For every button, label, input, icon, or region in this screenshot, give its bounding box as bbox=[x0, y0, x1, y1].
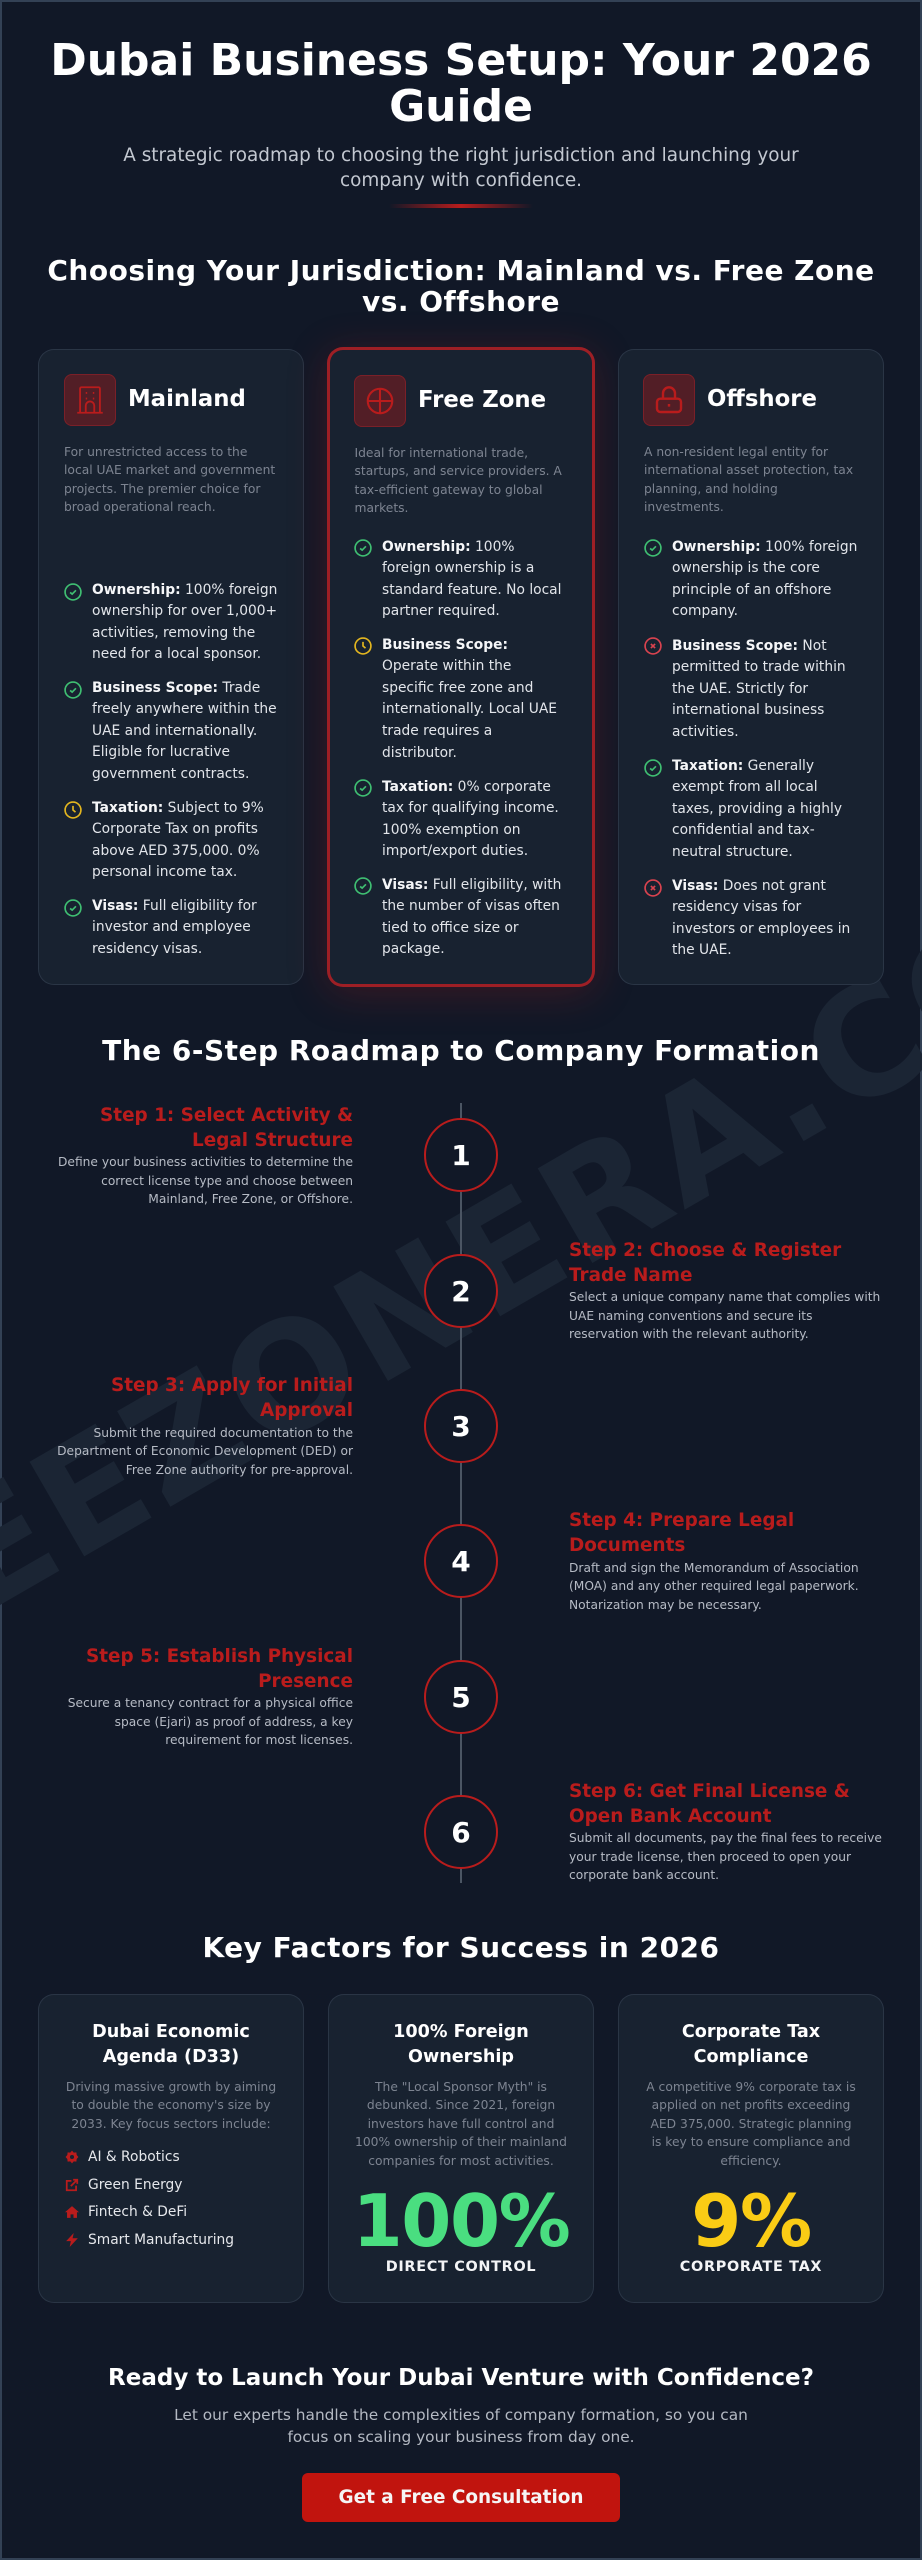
free zone visas: tied to office size or bbox=[382, 920, 519, 936]
step 5 text: Secure a tenancy contract for a physical office bbox=[68, 1696, 353, 1710]
free zone visas: Visas: Full eligibility, with bbox=[382, 877, 561, 893]
mainland ownership: ownership for over 1,000+ bbox=[92, 603, 277, 619]
offshore visas: the UAE. bbox=[672, 942, 732, 958]
free zone taxation bbox=[382, 779, 559, 859]
step 6 number bbox=[424, 1795, 498, 1869]
panel: D33 agenda: Smart Manufacturing bbox=[88, 2232, 234, 2248]
panel: D33 agenda: Fintech & DeFi bbox=[88, 2204, 187, 2220]
step 6 number: 6 bbox=[451, 1816, 471, 1848]
free zone business scope: distributor. bbox=[382, 745, 457, 761]
free zone description: markets. bbox=[354, 501, 408, 515]
offshore business scope: activities. bbox=[672, 724, 739, 740]
offshore ownership: ownership is the core bbox=[672, 560, 820, 576]
mainland business scope: Eligible for lucrative bbox=[92, 744, 230, 760]
step 3 number: 3 bbox=[451, 1410, 471, 1442]
mainland business scope: freely anywhere within the bbox=[92, 701, 277, 717]
step 2 text: Step 2: Choose & Register bbox=[569, 1240, 841, 1260]
step 1 text: Step 1: Select Activity & bbox=[100, 1104, 353, 1126]
step 4 text: Notarization may be necessary. bbox=[569, 1598, 762, 1612]
mainland description bbox=[64, 445, 275, 514]
offshore description: A non-resident legal entity for bbox=[644, 445, 828, 459]
free zone ownership bbox=[382, 539, 561, 619]
cta text: focus on scaling your business from day one. bbox=[287, 2428, 635, 2446]
offshore business scope: permitted to trade within bbox=[672, 659, 846, 675]
mainland description: For unrestricted access to the bbox=[64, 445, 247, 459]
cta text: Let our experts handle the complexities of company formation, so you can bbox=[174, 2406, 748, 2424]
D33 description bbox=[66, 2080, 276, 2131]
tax description: A competitive 9% corporate tax is bbox=[646, 2080, 856, 2094]
step 3 text: Department of Economic Development (DED) or bbox=[57, 1444, 353, 1458]
tax description: efficiency. bbox=[720, 2154, 782, 2168]
free zone ownership: foreign ownership is a bbox=[382, 560, 534, 576]
mainland taxation: Taxation: Subject to 9% bbox=[92, 800, 264, 816]
step 5 text: Step 5: Establish Physical bbox=[86, 1646, 353, 1666]
offshore ownership: company. bbox=[672, 603, 738, 619]
step 4 text bbox=[569, 1510, 859, 1612]
mainland taxation: Corporate Tax on profits bbox=[92, 821, 258, 837]
free zone business scope: Operate within the bbox=[382, 658, 511, 674]
mainland ownership: need for a local sponsor. bbox=[92, 646, 261, 662]
free zone taxation: tax for qualifying income. bbox=[382, 800, 559, 816]
panel: D33 agenda bbox=[38, 1994, 304, 2303]
step 1 text bbox=[58, 1104, 353, 1206]
mainland visas: Visas: Full eligibility for bbox=[92, 898, 257, 914]
panel: D33 agenda: AI & Robotics bbox=[88, 2149, 180, 2165]
offshore business scope: international business bbox=[672, 702, 824, 718]
step 2 text: Trade Name bbox=[569, 1264, 692, 1286]
step 1 number bbox=[424, 1118, 498, 1192]
step 6 text: Open Bank Account bbox=[569, 1806, 772, 1826]
offshore ownership bbox=[672, 539, 857, 619]
offshore title: Offshore bbox=[707, 386, 817, 412]
free zone business scope: specific free zone and bbox=[382, 680, 533, 696]
step 2 number: 2 bbox=[451, 1274, 471, 1308]
step 6 text: your trade license, then proceed to open your bbox=[569, 1850, 851, 1864]
tax title: Compliance bbox=[694, 2046, 808, 2066]
icon: cross bbox=[644, 637, 662, 655]
cta button: Get a Free Consultation bbox=[339, 2487, 583, 2508]
ownership description: investors have full control and bbox=[368, 2117, 554, 2131]
mainland ownership: Ownership: 100% foreign bbox=[92, 582, 277, 598]
offshore visas: residency visas for bbox=[672, 899, 801, 915]
free zone business scope: trade requires a bbox=[382, 723, 492, 739]
free zone visas: package. bbox=[382, 941, 445, 957]
mainland visas: investor and employee bbox=[92, 919, 251, 935]
free zone visas: the number of visas often bbox=[382, 898, 560, 914]
icon: check bbox=[64, 583, 82, 601]
offshore ownership: principle of an offshore bbox=[672, 582, 831, 598]
free zone ownership: partner required. bbox=[382, 603, 500, 619]
heading: jurisdiction bbox=[47, 254, 875, 318]
heading: jurisdiction: Choosing Your Jurisdiction: Mainland vs. Free Zone bbox=[47, 254, 875, 287]
step 3 text: Submit the required documentation to the bbox=[93, 1426, 353, 1440]
step 1 text: Legal Structure bbox=[192, 1130, 353, 1150]
stat label: DIRECT CONTROL bbox=[386, 2259, 536, 2275]
subtitle: company with confidence. bbox=[340, 170, 582, 190]
free zone taxation: 100% exemption on bbox=[382, 822, 521, 838]
free zone visas bbox=[382, 877, 561, 957]
free zone description bbox=[354, 446, 562, 515]
mainland description: broad operational reach. bbox=[64, 500, 216, 514]
step 2 number bbox=[424, 1254, 498, 1328]
tax title: Corporate Tax bbox=[682, 2022, 820, 2042]
ownership description: The "Local Sponsor Myth" is bbox=[375, 2080, 547, 2094]
mainland description: local UAE market and government bbox=[64, 463, 275, 477]
D33 title: Agenda (D33) bbox=[103, 2046, 239, 2066]
offshore taxation: exempt from all local bbox=[672, 779, 818, 795]
ownership title: 100% Foreign bbox=[393, 2022, 529, 2042]
step 5 number: 5 bbox=[451, 1680, 471, 1714]
step 3 number bbox=[424, 1389, 498, 1463]
ownership title: Ownership bbox=[408, 2046, 514, 2066]
sector: smart manufacturing bbox=[64, 2229, 66, 2231]
step 6 text: corporate bank account. bbox=[569, 1868, 719, 1882]
icon: clock bbox=[64, 801, 82, 819]
panel: D33 agenda: Green Energy bbox=[88, 2177, 182, 2193]
D33 description: 2033. Key focus sectors include: bbox=[71, 2117, 271, 2131]
step 2 text bbox=[569, 1240, 880, 1341]
step 6 text: Step 6: Get Final License & bbox=[569, 1780, 850, 1802]
timeline line bbox=[460, 1103, 462, 1883]
offshore business scope: the UAE. Strictly for bbox=[672, 681, 808, 697]
panel: mainland bbox=[38, 349, 304, 985]
icon: check bbox=[644, 539, 662, 557]
free zone title: Free Zone bbox=[418, 387, 546, 413]
step 2 text: reservation with the relevant authority. bbox=[569, 1327, 809, 1341]
mainland business scope: Business Scope: Trade bbox=[92, 680, 260, 696]
stat label: CORPORATE TAX bbox=[680, 2259, 822, 2275]
subtitle bbox=[123, 144, 799, 190]
step 4 number: 4 bbox=[451, 1544, 471, 1578]
icon: building bbox=[64, 374, 116, 426]
panel: free zone bbox=[327, 347, 595, 987]
free zone description: tax-efficient gateway to global bbox=[354, 483, 543, 497]
offshore description: planning, and holding bbox=[644, 482, 778, 496]
tax description: applied on net profits exceeding bbox=[652, 2098, 850, 2112]
icon: check bbox=[64, 899, 82, 917]
tax title bbox=[618, 2020, 884, 2069]
icon: check bbox=[354, 539, 372, 557]
sector: AI and robotics bbox=[66, 2149, 180, 2165]
offshore description: investments. bbox=[644, 500, 724, 514]
step 3 text: Approval bbox=[260, 1400, 353, 1421]
stat: 9%: 9% bbox=[691, 2179, 811, 2263]
free zone description: startups, and service providers. A bbox=[354, 464, 562, 478]
icon: globe bbox=[354, 375, 406, 427]
free zone ownership: Ownership: 100% bbox=[382, 539, 514, 555]
heading: roadmap: The 6-Step Roadmap to Company Formation bbox=[102, 1034, 820, 1067]
icon: clock bbox=[354, 637, 372, 655]
step 3 text bbox=[57, 1375, 354, 1477]
D33 description: Driving massive growth by aiming bbox=[66, 2080, 276, 2094]
step 1 text: Define your business activities to determine the bbox=[58, 1155, 353, 1169]
accent divider bbox=[389, 204, 533, 208]
offshore description bbox=[644, 445, 853, 514]
tax description: AED 375,000. Strategic planning bbox=[650, 2117, 852, 2131]
step 5 text: Presence bbox=[258, 1670, 353, 1692]
icon: cross bbox=[644, 879, 662, 897]
offshore taxation: neutral structure. bbox=[672, 844, 793, 860]
D33 title bbox=[92, 2022, 250, 2066]
free zone description: Ideal for international trade, bbox=[354, 446, 528, 460]
cta heading: Ready to Launch Your Dubai Venture with Confidence? bbox=[108, 2365, 814, 2391]
step 5 number bbox=[424, 1660, 498, 1734]
panel: offshore bbox=[618, 349, 884, 985]
ownership title bbox=[328, 2020, 594, 2069]
ownership description bbox=[328, 2078, 594, 2170]
offshore taxation: confidential and tax- bbox=[672, 822, 815, 838]
free zone ownership: standard feature. No local bbox=[382, 582, 561, 598]
offshore business scope bbox=[672, 638, 846, 740]
icon: check bbox=[644, 759, 662, 777]
free zone taxation: Taxation: 0% corporate bbox=[382, 779, 551, 795]
step 1 text: Mainland, Free Zone, or Offshore. bbox=[148, 1192, 353, 1206]
subtitle: A strategic roadmap to choosing the right jurisdiction and launching your bbox=[123, 144, 799, 166]
free zone business scope: internationally. Local UAE bbox=[382, 701, 557, 717]
panel: foreign ownership bbox=[328, 1994, 594, 2303]
tax description bbox=[618, 2078, 884, 2170]
step 4 text: Draft and sign the Memorandum of Association bbox=[569, 1561, 859, 1575]
offshore ownership: Ownership: 100% foreign bbox=[672, 539, 857, 555]
step 1 number: 1 bbox=[451, 1138, 471, 1172]
step 5 text: space (Ejari) as proof of address, a key bbox=[115, 1715, 353, 1729]
icon: check bbox=[354, 779, 372, 797]
mainland business scope: UAE and internationally. bbox=[92, 723, 257, 739]
icon: lock bbox=[643, 374, 695, 426]
offshore taxation: taxes, providing a highly bbox=[672, 801, 842, 817]
ownership description: 100% ownership of their mainland bbox=[355, 2135, 567, 2149]
title: Guide bbox=[389, 81, 533, 132]
tax description: is key to ensure compliance and bbox=[652, 2135, 850, 2149]
ownership description: debunked. Since 2021, foreign bbox=[367, 2098, 555, 2112]
offshore taxation bbox=[672, 758, 842, 860]
free zone business scope: Business Scope: bbox=[382, 637, 508, 653]
mainland description: projects. The premier choice for bbox=[64, 482, 260, 496]
offshore taxation: Taxation: Generally bbox=[672, 758, 814, 774]
mainland taxation: personal income tax. bbox=[92, 864, 237, 880]
free zone taxation: import/export duties. bbox=[382, 843, 528, 859]
mainland ownership bbox=[92, 582, 277, 662]
mainland ownership: activities, removing the bbox=[92, 625, 255, 641]
ownership description: companies for most activities. bbox=[368, 2154, 554, 2168]
offshore visas: investors or employees in bbox=[672, 921, 850, 937]
stat: 100%: 100% bbox=[353, 2179, 569, 2263]
step 3 text: Free Zone authority for pre-approval. bbox=[126, 1463, 353, 1477]
mainland title: Mainland bbox=[128, 386, 246, 412]
step 2 text: Select a unique company name that complies with bbox=[569, 1290, 880, 1304]
step 4 text: Documents bbox=[569, 1535, 685, 1556]
step 2 text: UAE naming conventions and secure its bbox=[569, 1309, 812, 1323]
heading: key factors: Key Factors for Success in 2026 bbox=[202, 1931, 720, 1964]
mainland visas bbox=[92, 898, 257, 957]
step 6 text: Submit all documents, pay the final fees to receive bbox=[569, 1831, 882, 1845]
mainland taxation: above AED 375,000. 0% bbox=[92, 843, 260, 859]
icon: check bbox=[354, 877, 372, 895]
step 5 text bbox=[68, 1646, 353, 1747]
icon: check bbox=[64, 681, 82, 699]
offshore visas: Visas: Does not grant bbox=[672, 878, 826, 894]
D33 description: to double the economy's size by bbox=[71, 2098, 271, 2112]
mainland business scope: government contracts. bbox=[92, 766, 249, 782]
offshore description: international asset protection, tax bbox=[644, 463, 853, 477]
heading: jurisdiction: vs. Offshore bbox=[362, 285, 560, 318]
offshore visas bbox=[672, 878, 850, 958]
free zone business scope bbox=[382, 637, 557, 761]
cta text bbox=[0, 2405, 922, 2448]
title bbox=[50, 35, 872, 132]
step 1 text: correct license type and choose between bbox=[101, 1174, 353, 1188]
step 4 number bbox=[424, 1524, 498, 1598]
step 4 text: (MOA) and any other required legal paperwork. bbox=[569, 1579, 859, 1593]
mainland taxation bbox=[92, 800, 264, 880]
mainland visas: residency visas. bbox=[92, 941, 202, 957]
mainland business scope bbox=[92, 680, 277, 782]
title: Dubai Business Setup: Your 2026 bbox=[50, 35, 872, 86]
step 4 text: Step 4: Prepare Legal bbox=[569, 1510, 794, 1531]
step 5 text: requirement for most licenses. bbox=[165, 1733, 353, 1747]
step 3 text: Step 3: Apply for Initial bbox=[111, 1375, 353, 1396]
D33 title: Dubai Economic bbox=[92, 2022, 250, 2042]
cta button bbox=[302, 2473, 620, 2522]
step 6 text bbox=[569, 1780, 882, 1882]
offshore business scope: Business Scope: Not bbox=[672, 638, 827, 654]
sector: fintech and DeFi bbox=[64, 2201, 66, 2203]
panel: corporate tax bbox=[618, 1994, 884, 2303]
sector: green energy bbox=[66, 2177, 182, 2193]
